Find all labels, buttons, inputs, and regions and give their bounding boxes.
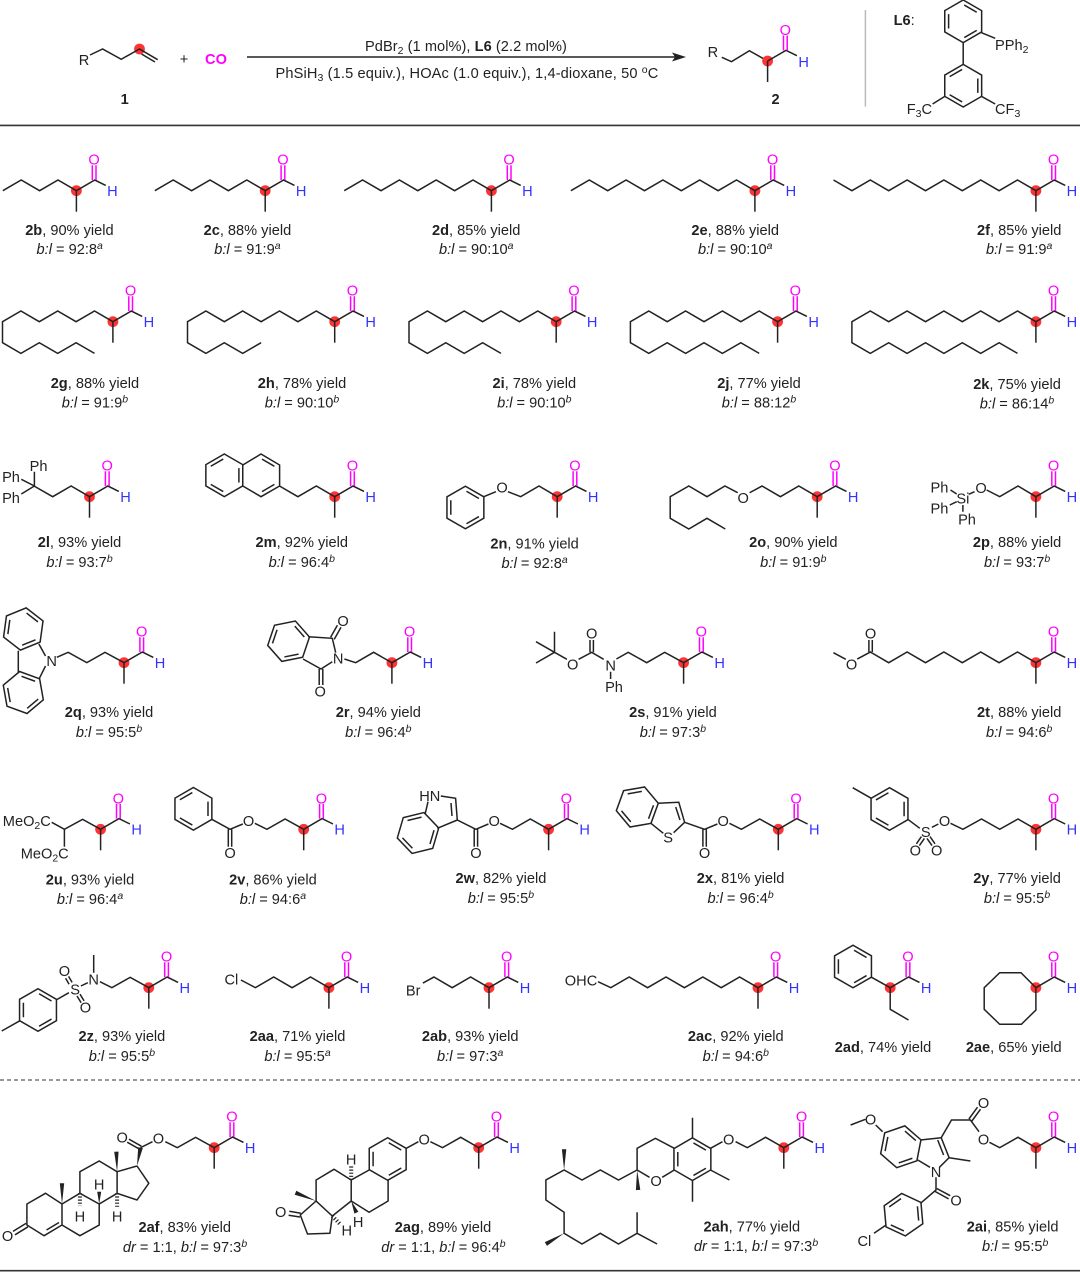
- compound 2f: H: [1067, 184, 1077, 200]
- compound 2c: O: [277, 153, 289, 169]
- compound 2r: 2r, 94% yield: [336, 705, 421, 721]
- compound 2f: 2f, 85% yield: [977, 223, 1061, 239]
- ligand L6: PPh: [995, 38, 1023, 54]
- product 2: [708, 23, 809, 108]
- compound 2e: [571, 153, 796, 258]
- compound 2k: b:l = 86:14: [980, 396, 1048, 412]
- compound 2y: [853, 788, 1077, 907]
- compound 2g: b: [122, 394, 128, 406]
- compound 2ah tocopherol: O: [723, 1132, 734, 1148]
- compound 2r: b:l = 96:4: [345, 725, 406, 741]
- compound 2m: b:l = 96:4: [269, 555, 329, 571]
- compound 2q: b:l = 95:5: [76, 725, 136, 741]
- compound 2ag estrone: H: [342, 1223, 352, 1239]
- compound 2z: O: [161, 950, 172, 966]
- compound 2p: Ph: [930, 502, 948, 518]
- ligand L6: F: [907, 102, 916, 118]
- compound 2n: [438, 459, 598, 572]
- compound 2b: b:l = 92:8: [37, 242, 97, 258]
- compound 2ai indomethacin: [851, 1096, 1077, 1255]
- compound 2ae: O: [1048, 950, 1059, 966]
- compound 2ai indomethacin: N: [931, 1165, 941, 1181]
- compound 2ag estrone: H: [509, 1141, 520, 1157]
- compound 2g: [2, 284, 154, 412]
- compound 2s: 2s, 91% yield: [629, 705, 717, 721]
- compound 2d: a: [508, 240, 514, 252]
- compound 2x: O: [699, 846, 710, 862]
- compound 2d: [344, 153, 533, 258]
- compound 2ab: b:l = 97:3: [437, 1049, 498, 1065]
- plus sign: +: [180, 52, 188, 68]
- compound 2s: O: [586, 627, 597, 643]
- compound 2g: b:l = 91:9: [62, 396, 122, 412]
- ligand L6: CF: [995, 102, 1014, 118]
- compound 2ab: a: [498, 1047, 504, 1059]
- compound 2n: O: [569, 459, 581, 475]
- compound 2s: O: [567, 658, 578, 674]
- compound 2h: b: [333, 394, 339, 406]
- compound 2ab: O: [501, 950, 512, 966]
- compound 2ai indomethacin: O: [865, 1113, 876, 1129]
- compound 2y: b: [1044, 889, 1050, 901]
- compound 2v: 2v, 86% yield: [229, 872, 317, 888]
- compound 2ai indomethacin: Cl: [858, 1234, 871, 1250]
- compound 2f: [834, 153, 1077, 258]
- compound 2i: H: [587, 315, 597, 331]
- compound 2c: 2c, 88% yield: [204, 223, 291, 239]
- compound 2p: [930, 459, 1077, 571]
- compound 2c: [155, 153, 306, 258]
- compound 2r: N: [333, 652, 343, 668]
- compound 2af steroid: H: [245, 1141, 255, 1157]
- compound 2t: b: [1047, 723, 1053, 735]
- compound 2ac: [565, 950, 799, 1065]
- compound 2af steroid: dr = 1:1, b:l = 97:3: [123, 1240, 241, 1256]
- compound 2b: 2b, 90% yield: [25, 223, 114, 239]
- compound 2v: [175, 788, 345, 908]
- compound 2af steroid: O: [117, 1131, 128, 1147]
- compound 2g: O: [125, 284, 136, 300]
- ligand L6: L6:: [894, 13, 915, 29]
- compound 2k: b: [1048, 394, 1054, 406]
- compound 2y: S: [921, 825, 931, 841]
- compound 2b: [3, 153, 118, 258]
- compound 2b: H: [107, 184, 118, 200]
- compound 2w: O: [489, 814, 500, 830]
- compound 2m: 2m, 92% yield: [256, 535, 348, 551]
- compound 2ai indomethacin: H: [1067, 1141, 1077, 1157]
- compound 2c: a: [275, 240, 281, 252]
- conditions below arrow: 3: [318, 72, 324, 84]
- compound 2l: Ph: [2, 491, 20, 507]
- compound 2u: O: [113, 791, 124, 807]
- compound 2z: [2, 950, 190, 1065]
- compound 2u: 2: [34, 820, 40, 832]
- compound 2u: 2u, 93% yield: [46, 872, 134, 888]
- compound 2ai indomethacin: O: [1048, 1110, 1059, 1126]
- divider: [864, 10, 866, 107]
- compound 2l: 2l, 93% yield: [38, 535, 121, 551]
- compound 2c: H: [296, 184, 306, 200]
- compound 2v: H: [334, 823, 345, 839]
- compound 2e: b:l = 90:10: [698, 242, 767, 258]
- compound 2r: O: [315, 684, 326, 700]
- compound 2p: 2p, 88% yield: [973, 535, 1061, 551]
- compound 2j: [630, 284, 819, 412]
- compound 2w: O: [561, 791, 572, 807]
- compound 2p: O: [1048, 459, 1059, 475]
- compound 2af steroid: O: [153, 1132, 164, 1148]
- ligand L6: 2: [1023, 44, 1029, 56]
- compound 2ai indomethacin: O: [978, 1132, 989, 1148]
- compound 2v: b:l = 94:6: [240, 892, 300, 908]
- compound 2j: O: [790, 284, 801, 300]
- compound 2s: b: [700, 723, 706, 735]
- compound 2i: 2i, 78% yield: [493, 376, 576, 392]
- ligand L6: 3: [1014, 108, 1020, 120]
- compound 2af steroid: H: [94, 1178, 104, 1194]
- compound 2t: O: [865, 627, 876, 643]
- compound 2u: C: [40, 814, 51, 830]
- compound 2g: H: [144, 315, 154, 331]
- compound 2s: H: [714, 656, 725, 672]
- compound 2ag estrone: b: [500, 1238, 506, 1250]
- compound 2s: N: [605, 658, 616, 674]
- compound 2ac: b: [763, 1047, 769, 1059]
- compound 2q: 2q, 93% yield: [65, 705, 153, 721]
- compound 2l: b: [107, 553, 113, 565]
- compound 2j: H: [808, 315, 819, 331]
- compound 2u: [3, 791, 142, 908]
- compound 2l: b:l = 93:7: [46, 555, 107, 571]
- compound 2aa: 2aa, 71% yield: [250, 1029, 345, 1045]
- compound 2b: a: [97, 240, 103, 252]
- compound 2n: H: [588, 490, 598, 506]
- compound 2af steroid: [2, 1110, 255, 1256]
- compound 2ae: H: [1067, 981, 1077, 997]
- compound 2l: O: [102, 459, 113, 475]
- compound 2v: O: [316, 791, 327, 807]
- compound 2c: b:l = 91:9: [214, 242, 275, 258]
- compound 2y: 2y, 77% yield: [973, 871, 1061, 887]
- compound 2r: O: [404, 625, 415, 641]
- compound 2t: b:l = 94:6: [986, 725, 1047, 741]
- compound 2aa: a: [325, 1047, 331, 1059]
- compound 2q: O: [136, 625, 147, 641]
- compound 2v: a: [300, 890, 306, 902]
- compound 2n: a: [562, 554, 568, 566]
- compound 2b: O: [88, 153, 100, 169]
- compound 2l: Ph: [2, 470, 20, 486]
- compound 2ac: OHC: [565, 973, 597, 989]
- compound 2u: a: [117, 890, 123, 902]
- compound 2y: O: [910, 843, 921, 859]
- compound 2h: b:l = 90:10: [265, 396, 333, 412]
- compound 2p: b: [1044, 553, 1050, 565]
- substrate 1: R: [79, 53, 89, 69]
- compound 2u: b:l = 96:4: [57, 892, 117, 908]
- compound 2ai indomethacin: b:l = 95:5: [982, 1239, 1043, 1255]
- compound 2j: b: [790, 394, 796, 406]
- compound 2u: H: [131, 823, 142, 839]
- compound 2ac: O: [770, 950, 781, 966]
- compound 2ac: b:l = 94:6: [703, 1049, 763, 1065]
- compound 2ah tocopherol: [545, 1110, 825, 1255]
- compound 2x: H: [809, 823, 820, 839]
- compound 2s: b:l = 97:3: [640, 725, 700, 741]
- compound 2z: 2z, 93% yield: [78, 1029, 165, 1045]
- compound 2q: b: [136, 723, 142, 735]
- compound 2t: H: [1067, 656, 1077, 672]
- compound 2h: [188, 284, 376, 412]
- compound 2u: 2: [52, 852, 58, 864]
- product 2: H: [798, 55, 809, 71]
- substrate 1: [79, 44, 158, 108]
- conditions above arrow: L6 (2.2 mol%): [475, 39, 567, 55]
- compound 2s: [536, 625, 725, 741]
- compound 2x: O: [718, 814, 729, 830]
- compound 2i: b:l = 90:10: [497, 396, 566, 412]
- compound 2af steroid: b: [241, 1238, 247, 1250]
- compound 2o: H: [848, 490, 858, 506]
- compound 2p: b:l = 93:7: [984, 555, 1044, 571]
- compound 2m: O: [347, 459, 358, 475]
- compound 2h: H: [365, 315, 376, 331]
- compound 2z: N: [88, 973, 99, 989]
- compound 2k: H: [1067, 315, 1077, 331]
- compound 2p: H: [1067, 490, 1077, 506]
- compound 2e: H: [786, 184, 796, 200]
- compound 2ai indomethacin: 2ai, 85% yield: [967, 1220, 1058, 1236]
- carbon monoxide: CO: [205, 52, 227, 68]
- compound 2x: [613, 781, 820, 907]
- compound 2p: Si: [956, 491, 969, 507]
- conditions above arrow: (1 mol%),: [404, 39, 475, 55]
- compound 2m: [206, 454, 376, 571]
- compound 2w: 2w, 82% yield: [455, 871, 546, 887]
- compound 2l: [2, 459, 131, 571]
- compound 2f: O: [1048, 153, 1059, 169]
- compound 2e: O: [767, 153, 778, 169]
- conditions above arrow: PdBr: [365, 39, 398, 55]
- compound 2ah tocopherol: H: [815, 1141, 825, 1157]
- compound 2u: MeO: [3, 814, 34, 830]
- product 2: O: [780, 23, 791, 39]
- compound 2ah tocopherol: O: [650, 1174, 662, 1190]
- compound 2p: O: [975, 481, 987, 497]
- compound 2ag estrone: O: [275, 1205, 286, 1221]
- compound 2l: Ph: [30, 459, 48, 475]
- compound 2d: b:l = 90:10: [439, 242, 508, 258]
- compound 2t: O: [1048, 625, 1059, 641]
- compound 2o: b: [821, 553, 827, 565]
- compound 2g: 2g, 88% yield: [51, 376, 139, 392]
- ligand L6: C: [921, 102, 932, 118]
- ligand L6: [894, 0, 1029, 120]
- compound 2y: H: [1067, 823, 1077, 839]
- compound 2ad: H: [921, 981, 931, 997]
- compound 2x: b:l = 96:4: [707, 891, 768, 907]
- compound 2ag estrone: O: [491, 1110, 502, 1126]
- compound 2x: O: [790, 791, 802, 807]
- compound 2ab: 2ab, 93% yield: [422, 1029, 518, 1045]
- compound 2z: b:l = 95:5: [89, 1049, 149, 1065]
- compound 2ag estrone: O: [419, 1132, 430, 1148]
- compound 2i: b: [566, 394, 572, 406]
- compound 2ah tocopherol: b: [812, 1237, 818, 1249]
- conditions above arrow: 2: [398, 45, 404, 57]
- compound 2ah tocopherol: O: [796, 1110, 807, 1126]
- compound 2z: S: [70, 983, 80, 999]
- substrate 1: 1: [121, 92, 129, 108]
- compound 2t: [833, 625, 1077, 741]
- compound 2o: O: [829, 459, 841, 475]
- compound 2y: b:l = 95:5: [984, 891, 1044, 907]
- compound 2ab: [406, 950, 530, 1065]
- compound 2ah tocopherol: 2ah, 77% yield: [704, 1220, 800, 1236]
- compound 2m: b: [329, 553, 335, 565]
- reaction arrow: [247, 52, 686, 62]
- compound 2ac: H: [789, 981, 799, 997]
- compound 2ag estrone: H: [346, 1153, 356, 1169]
- conditions below arrow: C: [648, 66, 658, 82]
- compound 2w: b:l = 95:5: [468, 891, 528, 907]
- compound 2f: b:l = 91:9: [986, 242, 1047, 258]
- compound 2f: a: [1047, 240, 1053, 252]
- compound 2y: O: [931, 843, 942, 859]
- compound 2aa: O: [341, 950, 352, 966]
- compound 2q: H: [155, 656, 165, 672]
- compound 2s: Ph: [605, 680, 623, 696]
- compound 2t: O: [846, 658, 857, 674]
- compound 2e: a: [767, 240, 773, 252]
- product 2: 2: [771, 92, 780, 108]
- compound 2s: O: [696, 625, 707, 641]
- compound 2ah tocopherol: dr = 1:1, b:l = 97:3: [694, 1239, 812, 1255]
- compound 2z: H: [180, 981, 190, 997]
- compound 2ai indomethacin: O: [950, 1193, 962, 1209]
- compound 2d: O: [503, 153, 515, 169]
- product 2: R: [708, 45, 718, 61]
- compound 2x: 2x, 81% yield: [697, 871, 784, 887]
- compound 2v: O: [224, 846, 236, 862]
- compound 2af steroid: O: [226, 1110, 238, 1126]
- compound 2af steroid: H: [112, 1209, 122, 1225]
- compound 2h: O: [347, 284, 358, 300]
- compound 2z: O: [80, 1001, 91, 1017]
- conditions below arrow: (1.5 equiv.), HOAc (1.0 equiv.), 1,4-dioxane, 50: [324, 66, 642, 82]
- conditions below arrow: PhSiH: [276, 66, 318, 82]
- compound 2r: [264, 614, 433, 741]
- compound 2u: MeO: [21, 846, 52, 862]
- compound 2e: 2e, 88% yield: [691, 223, 779, 239]
- compound 2w: b: [528, 889, 534, 901]
- compound 2ag estrone: H: [353, 1215, 363, 1231]
- compound 2d: 2d, 85% yield: [432, 223, 520, 239]
- compound 2ab: Br: [406, 983, 421, 999]
- compound 2aa: b:l = 95:5: [264, 1049, 325, 1065]
- compound 2y: O: [1048, 791, 1059, 807]
- compound 2n: O: [496, 480, 508, 496]
- compound 2ad: [825, 940, 931, 1056]
- compound 2i: O: [568, 284, 580, 300]
- compound 2p: Ph: [958, 513, 976, 529]
- compound 2w: H: [579, 823, 590, 839]
- compound 2q: N: [46, 654, 57, 670]
- compound 2j: 2j, 77% yield: [717, 376, 801, 392]
- compound 2n: b:l = 92:8: [501, 556, 562, 572]
- compound 2h: 2h, 78% yield: [258, 376, 346, 392]
- compound 2ai indomethacin: O: [978, 1096, 989, 1112]
- compound 2v: O: [243, 814, 254, 830]
- compound 2ag estrone: dr = 1:1, b:l = 96:4: [381, 1240, 500, 1256]
- compound 2ac: 2ac, 92% yield: [688, 1029, 784, 1045]
- compound 2af steroid: O: [2, 1229, 13, 1245]
- compound 2w: HN: [419, 789, 440, 805]
- compound 2k: [852, 284, 1077, 412]
- compound 2u: C: [58, 846, 69, 862]
- compound 2o: b:l = 91:9: [760, 555, 821, 571]
- reaction scheme header: [79, 0, 1029, 120]
- compound 2t: 2t, 88% yield: [977, 705, 1061, 721]
- compound 2ag estrone: 2ag, 89% yield: [395, 1220, 491, 1236]
- compound 2r: H: [423, 656, 433, 672]
- compound 2o: O: [738, 491, 749, 507]
- compound 2w: O: [470, 846, 482, 862]
- compound 2ag estrone: [275, 1110, 520, 1256]
- compound 2w: [394, 789, 590, 907]
- compound 2aa: [225, 950, 370, 1065]
- compound 2d: H: [522, 184, 533, 200]
- compound 2ae: 2ae, 65% yield: [966, 1040, 1062, 1056]
- compound 2aa: H: [360, 981, 370, 997]
- compound 2o: [670, 459, 858, 571]
- compound 2ab: H: [520, 981, 530, 997]
- compound 2ad: 2ad, 74% yield: [835, 1040, 931, 1056]
- compound 2aa: Cl: [225, 973, 238, 989]
- compound 2n: 2n, 91% yield: [490, 536, 579, 552]
- compound 2r: O: [337, 614, 349, 630]
- compound 2x: S: [663, 831, 673, 847]
- compound 2k: O: [1048, 284, 1059, 300]
- ligand L6: 3: [916, 108, 922, 120]
- compound 2ad: O: [902, 950, 914, 966]
- compound 2z: b: [149, 1047, 155, 1059]
- compound 2q: [0, 604, 165, 741]
- compound 2o: 2o, 90% yield: [749, 535, 838, 551]
- compound 2x: b: [768, 889, 774, 901]
- conditions below arrow: o: [642, 64, 648, 76]
- compound 2j: b:l = 88:12: [722, 396, 790, 412]
- compound 2p: Ph: [930, 481, 948, 497]
- compound 2z: O: [59, 964, 70, 980]
- compound 2r: b: [406, 723, 412, 735]
- compound 2l: H: [120, 490, 131, 506]
- compound 2y: O: [939, 814, 950, 830]
- compound 2m: H: [365, 490, 376, 506]
- compound 2ai indomethacin: b: [1043, 1237, 1049, 1249]
- compound 2af steroid: H: [75, 1209, 85, 1225]
- compound 2i: [409, 284, 597, 412]
- compound 2ae: [966, 950, 1077, 1056]
- compound 2af steroid: 2af, 83% yield: [138, 1220, 231, 1236]
- compound 2k: 2k, 75% yield: [973, 377, 1061, 393]
